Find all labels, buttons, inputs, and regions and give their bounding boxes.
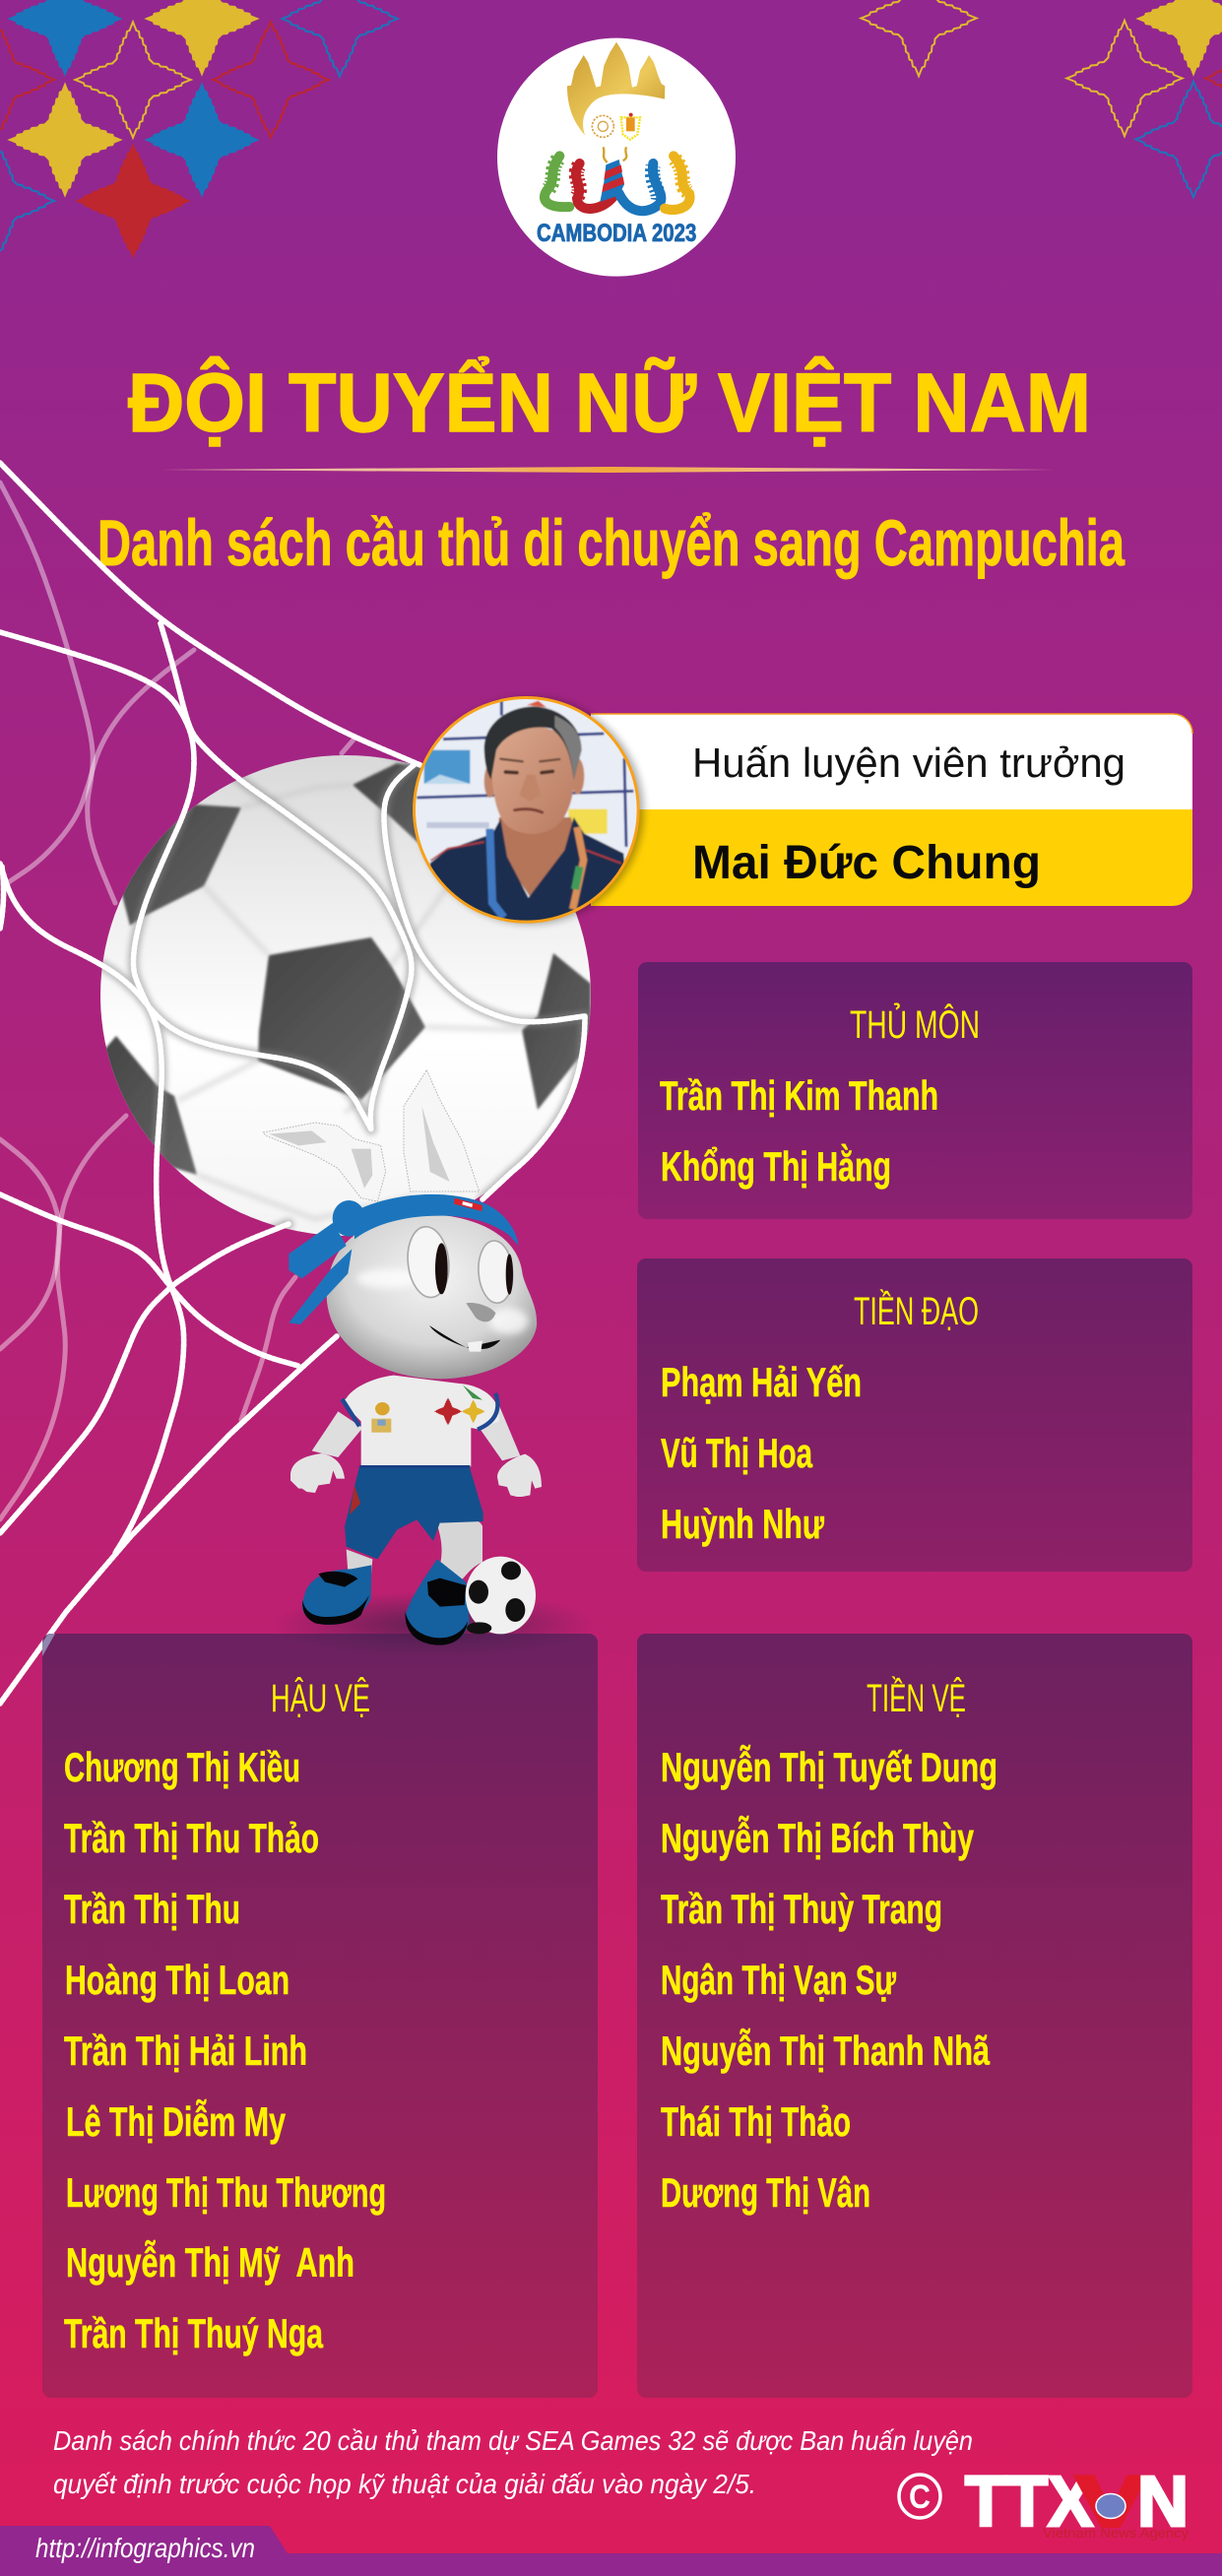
shorts	[345, 1466, 483, 1559]
title divider	[160, 467, 1056, 473]
player list: Trần Thị Thu Thảo	[64, 1815, 319, 1861]
mascot shadow	[271, 1591, 596, 1658]
player list: Huỳnh Như	[661, 1501, 824, 1547]
icon: globe	[1096, 2493, 1126, 2519]
player list: Trần Thị Thuý Nga	[64, 2310, 323, 2356]
decorative stars: top right	[861, 0, 1222, 197]
mascot: rabbit footballer	[263, 1070, 542, 1645]
player list: Nguyễn Thị Mỹ Anh	[66, 2238, 354, 2286]
footnote: quyết định trước cuộc họp kỹ thuật của giải đấu vào ngày 2/5.	[53, 2469, 756, 2499]
logo: SEA Games Cambodia 2023	[497, 38, 736, 277]
ball seams	[177, 785, 522, 1219]
player list	[661, 1743, 997, 2216]
heading: HẬU VỆ	[271, 1676, 370, 1720]
player list: Trần Thị Hải Linh	[64, 2028, 307, 2074]
agency caption: Vietnam News Agency	[1043, 2525, 1189, 2541]
footer bar	[0, 2526, 1222, 2576]
logo: TTXVN: N	[1137, 2463, 1189, 2542]
player list: Ngân Thị Vạn Sự	[661, 1957, 896, 2003]
face	[484, 765, 496, 798]
player list: Trần Thị Kim Thanh	[660, 1072, 938, 1119]
website url: http://infographics.vn	[35, 2533, 255, 2563]
logo: TTXVN	[965, 2463, 1189, 2542]
facial features	[500, 759, 559, 812]
net: faint background ropes	[0, 483, 354, 1519]
footnote	[53, 2425, 973, 2499]
left shoe	[302, 1565, 371, 1625]
panel: defenders	[42, 1634, 598, 2398]
player list: Dương Thị Vân	[661, 2169, 870, 2216]
logo caption: CAMBODIA 2023	[537, 220, 696, 247]
heading: TIỀN VỆ	[867, 1675, 966, 1720]
legs	[347, 1517, 482, 1580]
player list: Hoàng Thị Loan	[65, 1957, 289, 2003]
player list	[661, 1359, 862, 1547]
headband	[289, 1194, 519, 1324]
head	[327, 1214, 537, 1379]
headband flag	[454, 1198, 482, 1211]
head highlights	[356, 1268, 529, 1334]
arms	[312, 1405, 520, 1460]
logo: TTXVN: TTX	[965, 2463, 1093, 2542]
coach name: Mai Đức Chung	[692, 837, 1041, 889]
player list: Nguyễn Thị Thanh Nhã	[661, 2027, 990, 2074]
shirt badges	[371, 1385, 485, 1433]
ears	[263, 1070, 480, 1201]
ball patches	[98, 763, 591, 1175]
decorative stars: top left	[0, 0, 398, 259]
player list: Thái Thị Thảo	[661, 2098, 851, 2145]
heading: THỦ MÔN	[850, 1001, 980, 1047]
small ball	[466, 1557, 536, 1634]
panel: forwards	[637, 1258, 1192, 1572]
nose and mouth	[429, 1303, 500, 1352]
icon: central twisted column	[600, 147, 626, 202]
shirt	[429, 817, 625, 921]
player list: Lương Thị Thu Thương	[66, 2169, 386, 2216]
player list	[660, 1072, 938, 1190]
shirt	[342, 1376, 499, 1466]
player list: Chương Thị Kiều	[64, 1744, 300, 1790]
panel: midfielders	[637, 1634, 1192, 2398]
icon: small emblems	[592, 113, 640, 140]
player list	[64, 1744, 386, 2356]
copyright symbol	[899, 2475, 940, 2518]
lanyards	[489, 829, 504, 918]
footnote: Danh sách chính thức 20 cầu thủ tham dự SEA Games 32 sẽ được Ban huấn luyện	[53, 2425, 973, 2456]
rope shadows on ball	[101, 758, 589, 1230]
player list: Phạm Hải Yến	[661, 1359, 862, 1405]
panel: coach name bar	[591, 714, 1192, 906]
coach role: Huấn luyện viên trưởng	[692, 740, 1126, 786]
neck	[499, 817, 578, 899]
player list: Nguyễn Thị Tuyết Dung	[661, 1743, 997, 1790]
title: ĐỘI TUYỂN NỮ VIỆT NAM	[128, 356, 1091, 449]
panel: goalkeepers	[638, 962, 1192, 1219]
player list: Trần Thị Thuỳ Trang	[661, 1886, 942, 1932]
eyes	[405, 1225, 515, 1304]
player list: Trần Thị Thu	[64, 1886, 240, 1932]
logo: TTXVN: V	[1076, 2463, 1145, 2542]
copyright symbol: C	[909, 2479, 931, 2516]
net: white ropes	[0, 463, 585, 1704]
soccer ball	[100, 755, 591, 1236]
hands	[290, 1453, 542, 1497]
photo: coach portrait	[411, 696, 644, 929]
icon: naga serpents	[545, 156, 690, 211]
player list: Vũ Thị Hoa	[661, 1430, 812, 1476]
player list: Lê Thị Diễm My	[66, 2097, 286, 2145]
right shoe	[406, 1559, 470, 1645]
hair	[484, 706, 582, 780]
player list: Khổng Thị Hằng	[661, 1142, 891, 1190]
icon: golden crown	[567, 42, 665, 135]
player list: Nguyễn Thị Bích Thùy	[661, 1814, 974, 1861]
heading: TIỀN ĐẠO	[854, 1288, 979, 1333]
